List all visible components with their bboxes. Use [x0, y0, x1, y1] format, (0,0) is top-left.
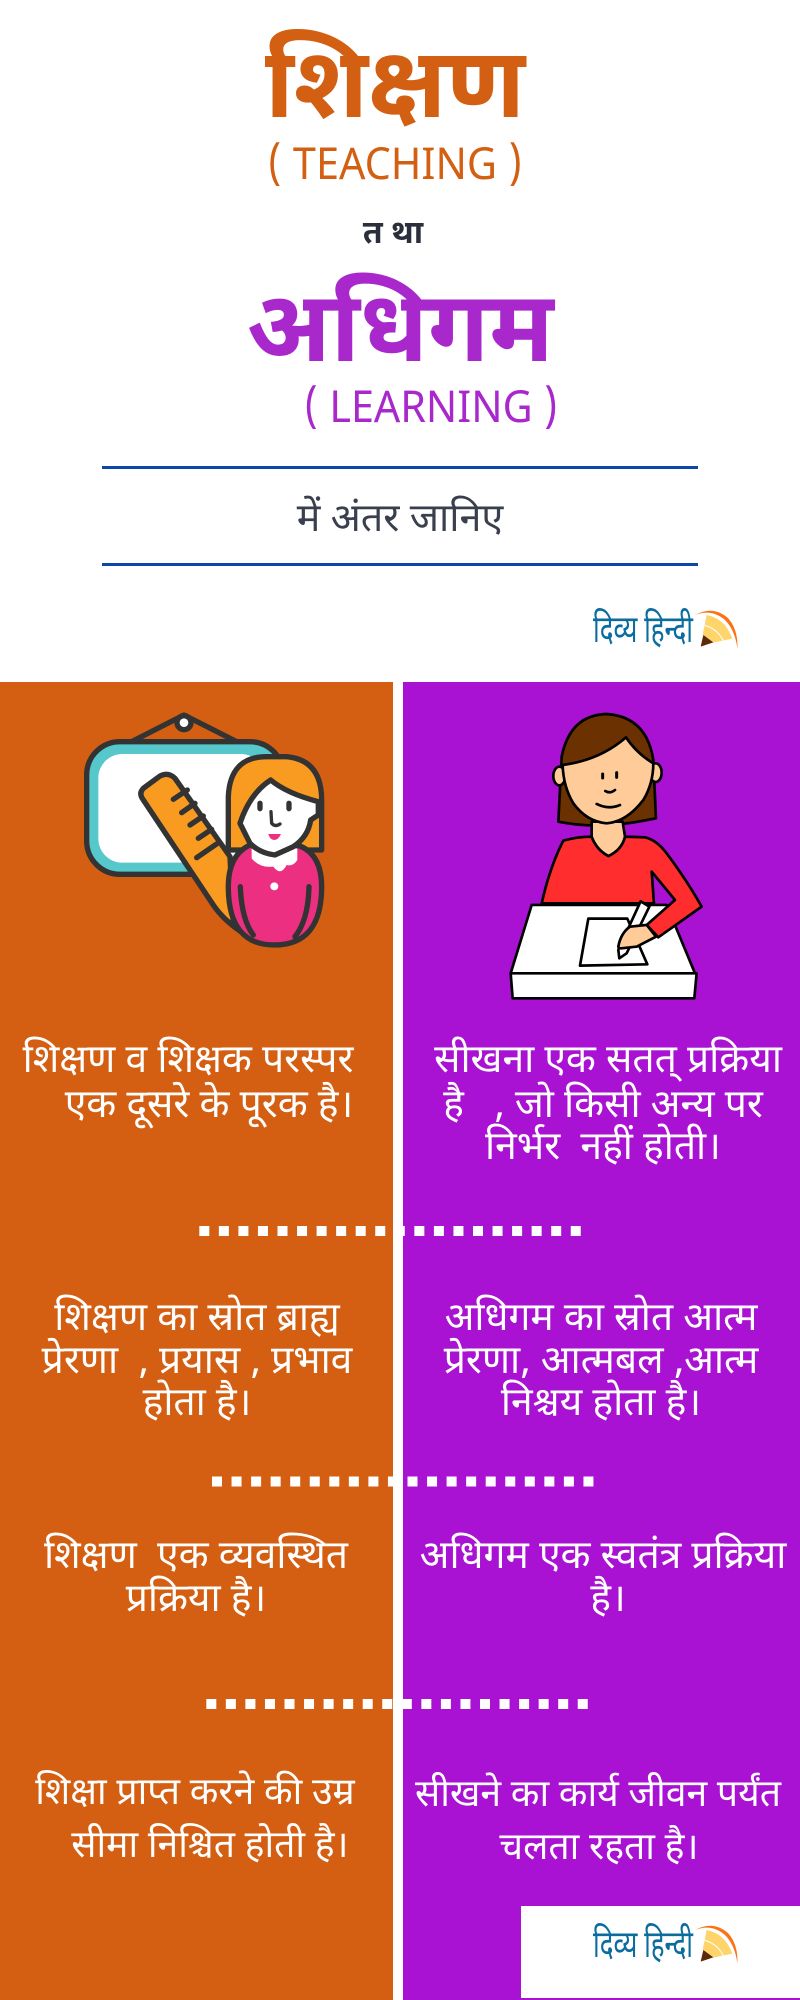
text: learning row 1 — [434, 1037, 783, 1175]
logo: divya hindi top: दिव्य हिन्दी — [593, 607, 694, 658]
text: learning row 4: सीखने का कार्य जीवन पर्यंत — [415, 1772, 782, 1822]
logo: divya hindi bottom: दिव्य हिन्दी — [593, 1922, 694, 1973]
text: learning row 3 — [420, 1533, 787, 1627]
text: learning row 1: निर्भर नहीं होती। — [485, 1124, 721, 1175]
text: teaching row 3: शिक्षण एक व्यवस्थित — [44, 1533, 349, 1584]
text: teaching row 3 — [44, 1533, 349, 1627]
text: learning row 2: प्रेरणा, आत्मबल ,आत्म — [444, 1338, 759, 1389]
text: learning row 2: निश्चय होता है। — [501, 1380, 701, 1431]
text: learning row 2: अधिगम का स्रोत आत्म — [445, 1295, 758, 1346]
panel: learning — [393, 682, 800, 2000]
text: teaching row 4: सीमा निश्चित होती है। — [71, 1824, 349, 1873]
dotted divider 1 — [199, 1226, 581, 1236]
text: learning row 4: चलता रहता है। — [499, 1826, 699, 1875]
text: learning row 3: है। — [590, 1576, 626, 1627]
text: learning row 1: है , जो किसी अन्य पर — [443, 1082, 764, 1133]
icon: teacher with board and ruler — [87, 715, 322, 945]
rule bottom — [102, 563, 698, 566]
text: teaching row 3: प्रक्रिया है। — [126, 1576, 266, 1627]
text: teaching row 2 — [42, 1295, 354, 1431]
text: learning row 1: सीखना एक सतत् प्रक्रिया — [434, 1037, 783, 1088]
subtitle: learning: ( LEARNING ) — [304, 383, 558, 440]
text: teaching row 4 — [35, 1770, 355, 1873]
dotted divider 3 — [206, 1699, 588, 1709]
dotted divider 2 — [212, 1476, 594, 1486]
rule top — [102, 466, 698, 469]
text: learning row 3: अधिगम एक स्वतंत्र प्रक्रिया — [420, 1533, 787, 1584]
text: teaching row 1 — [23, 1037, 354, 1133]
text: teaching row 2: होता है। — [143, 1380, 251, 1431]
subtitle: teaching: ( TEACHING ) — [268, 140, 522, 197]
panel: teaching — [0, 682, 393, 2000]
text: teaching row 2: शिक्षण का स्रोत ब्राह्य — [54, 1295, 341, 1346]
title: shikshan: शिक्षण — [265, 29, 527, 157]
text: teaching row 1: शिक्षण व शिक्षक परस्पर — [23, 1037, 354, 1088]
logo box — [521, 1906, 800, 1998]
text: learning row 4 — [415, 1772, 782, 1875]
icon: student writing at desk — [511, 714, 702, 998]
connector word: त था — [363, 215, 424, 257]
heading: find the difference: में अंतर जानिए — [297, 495, 504, 548]
text: teaching row 1: एक दूसरे के पूरक है। — [65, 1082, 353, 1133]
title: adhigam: अधिगम — [246, 272, 555, 402]
text: learning row 2 — [444, 1295, 759, 1431]
text: teaching row 2: प्रेरणा , प्रयास , प्रभाव — [42, 1338, 354, 1389]
text: teaching row 4: शिक्षा प्राप्त करने की उम्र — [35, 1770, 355, 1820]
